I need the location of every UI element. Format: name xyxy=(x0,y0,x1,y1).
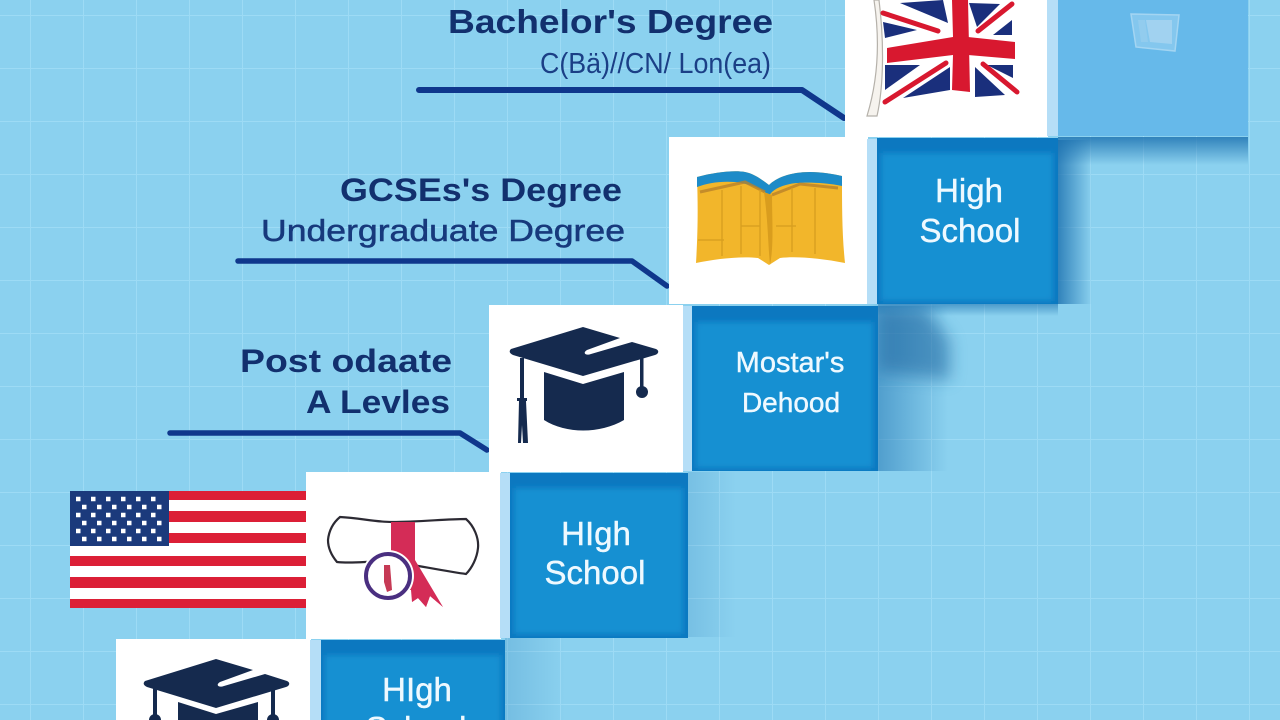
card edge strip xyxy=(867,139,878,304)
label: Master's Dehood: Dehood xyxy=(742,387,840,418)
step 1: Bachelor's Degree xyxy=(419,0,1248,137)
white card xyxy=(116,639,311,720)
step 5: High School, cropped xyxy=(116,639,505,720)
icon: graduation cap xyxy=(510,327,658,443)
card edge strip xyxy=(683,306,693,471)
label: High School: HIgh xyxy=(382,671,452,708)
icon: diploma scroll xyxy=(328,517,478,607)
heading: GCSEs's Degree: GCSEs's Degree xyxy=(340,172,622,208)
label: High School: HIgh xyxy=(561,515,631,552)
step 2: GCSEs / Undergraduate xyxy=(238,137,1058,304)
leader line xyxy=(170,433,487,450)
label: High School: School xyxy=(920,212,1020,249)
subheading: C(Bä)//CN/ Lon(ea) xyxy=(540,48,771,80)
icon: open book xyxy=(696,171,845,265)
card edge strip xyxy=(310,640,321,720)
label: High School: School xyxy=(545,554,645,591)
blue block xyxy=(692,306,878,471)
heading: Bachelor's Degree: Bachelor's Degree xyxy=(448,3,773,40)
card edge strip xyxy=(500,473,510,638)
leader line xyxy=(238,261,667,286)
step 4: High School with US flag xyxy=(70,472,688,639)
subheading: A Levles: A Levles xyxy=(306,384,450,420)
label: High School: High xyxy=(935,172,1003,209)
label: Master's Dehood: Mostar's xyxy=(736,347,844,379)
blue block xyxy=(321,640,505,720)
block shadows xyxy=(505,137,1248,720)
icon: US flag xyxy=(70,491,306,608)
step 3: Post graduate xyxy=(170,305,878,472)
icon: graduation cap xyxy=(144,659,289,720)
subheading: Undergraduate Degree: Undergraduate Degree xyxy=(261,213,625,248)
icon: UK flag xyxy=(867,0,1017,116)
white card xyxy=(845,0,1048,137)
white card xyxy=(669,137,868,304)
leader line xyxy=(419,90,844,118)
white card xyxy=(306,472,501,639)
white card xyxy=(489,305,683,472)
card edge strip xyxy=(1047,0,1058,136)
light blue block xyxy=(1058,0,1248,136)
blue block xyxy=(510,473,688,638)
heading: Post odaate: Post odaate xyxy=(240,343,452,379)
emblem xyxy=(1131,14,1179,51)
blue block xyxy=(877,138,1058,304)
